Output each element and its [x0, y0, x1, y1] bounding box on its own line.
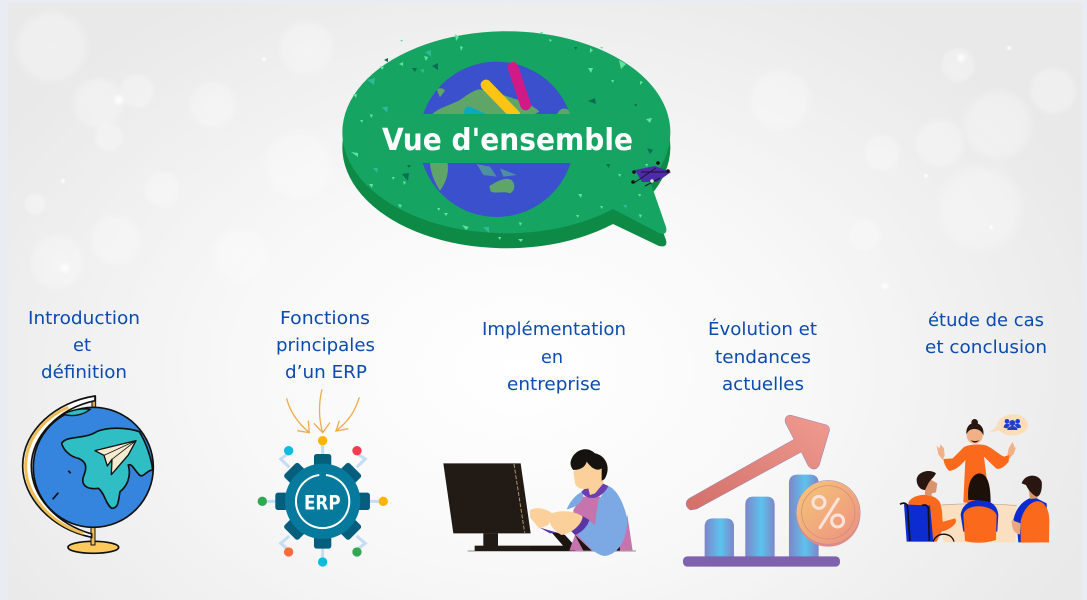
label: Introduction et définition: définition — [41, 362, 127, 383]
label: Implémentation en entreprise: en — [541, 347, 563, 368]
icon: drone — [631, 161, 671, 186]
label: Introduction et définition: Introduction — [28, 308, 140, 329]
speckles — [351, 32, 652, 242]
icon: group meeting — [900, 414, 1049, 543]
paper plane — [95, 441, 136, 475]
title text: Vue d'ensemble — [382, 123, 633, 158]
orange arrows — [287, 389, 359, 433]
label: étude de cas et conclusion: et conclusion — [925, 337, 1047, 358]
label: Fonctions principales d'un ERP: d’un ERP — [285, 362, 367, 383]
icon: computer monitor — [443, 463, 636, 552]
speech cloud — [988, 414, 1028, 436]
banner — [370, 114, 645, 163]
presenter — [937, 419, 1017, 505]
globe on bubble — [419, 62, 574, 217]
label: étude de cas et conclusion: étude de cas — [928, 310, 1044, 331]
icon: growth chart with percent coin — [683, 415, 860, 567]
bubble 3D side — [342, 46, 670, 248]
bars — [705, 518, 734, 557]
label: étude de cas et conclusion — [925, 310, 1047, 358]
seated right person — [1012, 476, 1049, 543]
speech bubble: Vue d'ensemble — [342, 31, 671, 248]
label: Implémentation en entreprise: entreprise — [507, 374, 601, 395]
label: Fonctions principales d'un ERP — [276, 308, 375, 383]
people icon — [1004, 419, 1021, 430]
label: Évolution et tendances actuelles: actuelles — [722, 374, 804, 395]
label: Évolution et tendances actuelles — [708, 318, 817, 395]
label: Implémentation en entreprise — [482, 319, 626, 395]
percent coin — [796, 483, 860, 547]
icon: person typing — [530, 449, 633, 556]
table — [942, 504, 1017, 542]
seated center person — [961, 473, 998, 543]
label: Évolution et tendances actuelles: Évolution et — [708, 318, 817, 340]
label: Introduction et définition — [28, 308, 140, 383]
label: Introduction et définition: et — [73, 335, 91, 356]
bubble face — [342, 31, 670, 234]
gear — [275, 454, 370, 549]
label: Fonctions principales d'un ERP: principales — [276, 335, 375, 356]
colored rays — [486, 67, 526, 115]
connectors — [267, 445, 380, 558]
icon: ERP gear: ERP — [304, 491, 341, 514]
label: Évolution et tendances actuelles: tendances — [715, 347, 811, 368]
icon: globe with paper plane — [23, 396, 153, 553]
arrow — [686, 415, 830, 510]
icon: ERP gear — [258, 389, 388, 567]
label: Fonctions principales d'un ERP: Fonctions — [280, 308, 370, 329]
seated left person — [900, 471, 956, 542]
nodes — [318, 436, 327, 445]
label: Implémentation en entreprise: Implémentation — [482, 319, 626, 340]
